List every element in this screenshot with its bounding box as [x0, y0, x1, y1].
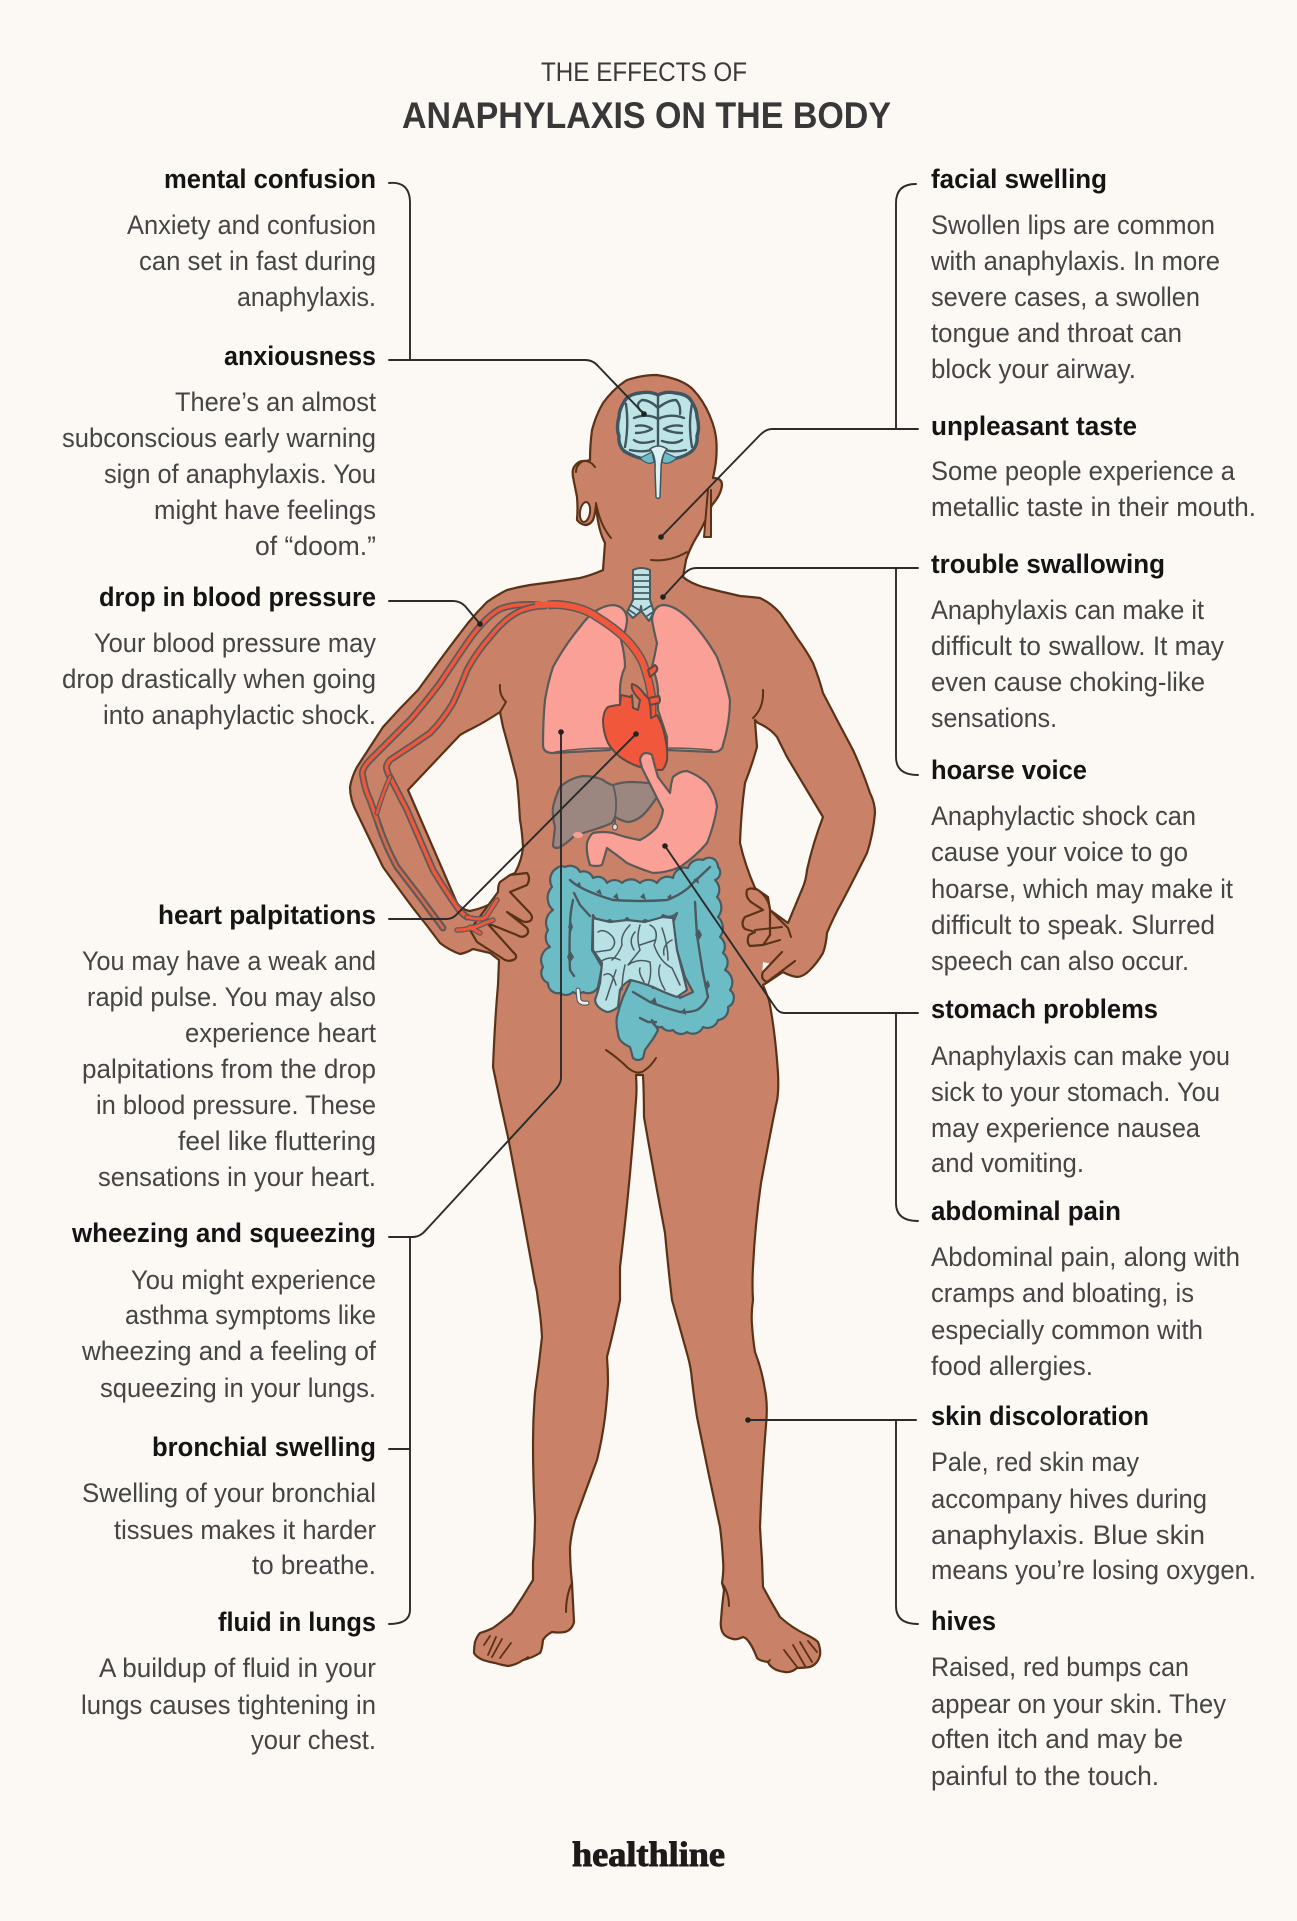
text block: drop in blood pressure [62, 582, 377, 730]
text block: fluid in lungs: lungs causes tightening in [81, 1690, 376, 1720]
text block: heart palpitations: palpitations from the drop [82, 1054, 376, 1084]
text block: unpleasant taste: unpleasant taste [931, 411, 1137, 441]
appendix [578, 990, 587, 1003]
text block: abdominal pain: especially common with [931, 1315, 1203, 1345]
text block: heart palpitations: experience heart [185, 1018, 377, 1048]
text block: trouble swallowing: difficult to swallow. It may [931, 631, 1225, 661]
text block: skin discoloration: Pale, red skin may [931, 1447, 1140, 1477]
text block: stomach problems [931, 994, 1230, 1178]
aortic arch [535, 604, 652, 715]
text block: trouble swallowing: even cause choking-like [931, 667, 1205, 697]
left earring [579, 501, 591, 523]
small intestine [593, 917, 687, 1012]
text block: unpleasant taste [931, 411, 1256, 522]
text block: fluid in lungs [81, 1607, 376, 1755]
text block: hives: appear on your skin. They [931, 1689, 1227, 1719]
text block: heart palpitations: feel like fluttering [178, 1126, 376, 1156]
text block: wheezing and squeezing: squeezing in your lungs. [100, 1373, 376, 1403]
text block: hives: hives [931, 1606, 996, 1636]
text block: anxiousness: There’s an almost [175, 387, 377, 417]
text block: anxiousness: of “doom.” [255, 531, 376, 561]
healthline logo: healthline [572, 1835, 725, 1874]
text block: facial swelling: facial swelling [931, 164, 1107, 194]
text block: stomach problems: Anaphylaxis can make you [931, 1041, 1230, 1071]
text block: anxiousness: subconscious early warning [62, 423, 376, 453]
text block: unpleasant taste: metallic taste in their mouth. [931, 492, 1256, 522]
text block: drop in blood pressure: Your blood pressure may [94, 628, 377, 658]
text block: wheezing and squeezing: wheezing and squeezing [71, 1218, 376, 1248]
text block: stomach problems: and vomiting. [931, 1148, 1084, 1178]
text block: hives: painful to the touch. [931, 1761, 1159, 1791]
text block: facial swelling: block your airway. [931, 354, 1136, 384]
title: THE EFFECTS OF [541, 57, 747, 87]
body silhouette [350, 375, 875, 1672]
text block: anxiousness: might have feelings [154, 495, 376, 525]
text block: bronchial swelling: bronchial swelling [152, 1432, 376, 1462]
text block: wheezing and squeezing: You might experience [131, 1265, 376, 1295]
appendix highlight [578, 990, 587, 1003]
text block: mental confusion: Anxiety and confusion [127, 210, 376, 240]
text block: bronchial swelling: tissues makes it harder [114, 1515, 376, 1545]
title: ANAPHYLAXIS ON THE BODY [402, 95, 891, 136]
text block: bronchial swelling: to breathe. [252, 1550, 376, 1580]
text block: mental confusion [127, 164, 376, 312]
heart [603, 665, 667, 770]
leader: stomach problems and abdominal pain [662, 843, 918, 1221]
text block: facial swelling: Swollen lips are common [931, 210, 1215, 240]
text block: skin discoloration: skin discoloration [931, 1401, 1149, 1431]
text block: hoarse voice: difficult to speak. Slurred [931, 910, 1215, 940]
text block: unpleasant taste: Some people experience a [931, 456, 1235, 486]
text block: facial swelling [930, 164, 1220, 384]
text block: anxiousness: anxiousness [224, 341, 376, 371]
text block: anxiousness [62, 341, 377, 561]
text block: trouble swallowing: trouble swallowing [931, 549, 1165, 579]
text block: stomach problems: stomach problems [931, 994, 1158, 1024]
text block: fluid in lungs: your chest. [251, 1725, 376, 1755]
text block: skin discoloration: means you’re losing oxygen. [931, 1555, 1256, 1585]
text block: fluid in lungs: A buildup of fluid in your [99, 1653, 376, 1683]
text block: wheezing and squeezing: wheezing and a feeling of [81, 1336, 377, 1366]
leader: trouble swallowing and hoarse voice [660, 568, 918, 775]
text block: abdominal pain: food allergies. [931, 1351, 1093, 1381]
text block: hoarse voice: cause your voice to go [931, 837, 1188, 867]
text block: hives: Raised, red bumps can [931, 1652, 1189, 1682]
text block: trouble swallowing [931, 549, 1225, 733]
text block: hoarse voice: Anaphylactic shock can [931, 801, 1196, 831]
leader: skin discoloration and hives [745, 1417, 918, 1624]
text block: heart palpitations: sensations in your heart. [98, 1162, 376, 1192]
text block: facial swelling: with anaphylaxis. In more [930, 246, 1220, 276]
text block: bronchial swelling: Swelling of your bronchial [82, 1478, 376, 1508]
text block: skin discoloration: anaphylaxis. Blue skin [931, 1520, 1205, 1550]
text block: mental confusion: can set in fast during [139, 246, 376, 276]
text block: abdominal pain [931, 1196, 1240, 1381]
text block: heart palpitations [82, 900, 377, 1192]
text block: bronchial swelling [82, 1432, 376, 1580]
right earring [704, 490, 711, 537]
body creases [500, 461, 763, 1612]
text block: heart palpitations: in blood pressure. These [96, 1090, 376, 1120]
text block: heart palpitations: rapid pulse. You may also [87, 982, 376, 1012]
title [402, 57, 891, 136]
text block: hoarse voice: hoarse, which may make it [931, 874, 1234, 904]
text block: fluid in lungs: fluid in lungs [218, 1607, 376, 1637]
text block: wheezing and squeezing: asthma symptoms like [125, 1300, 376, 1330]
stomach [587, 753, 717, 873]
text block: trouble swallowing: Anaphylaxis can make it [931, 595, 1205, 625]
text block: facial swelling: severe cases, a swollen [931, 282, 1200, 312]
right hand [742, 888, 795, 982]
leader: mental confusion and anxiousness [389, 183, 647, 417]
text block: abdominal pain: abdominal pain [931, 1196, 1121, 1226]
text block: anxiousness: sign of anaphylaxis. You [104, 459, 376, 489]
text block: hives [931, 1606, 1227, 1791]
brain [618, 392, 698, 498]
text block: heart palpitations: heart palpitations [158, 900, 376, 930]
text block: hoarse voice: hoarse voice [931, 755, 1087, 785]
text block: drop in blood pressure: drop in blood pressure [99, 582, 376, 612]
text block: wheezing and squeezing [71, 1218, 377, 1403]
text block: facial swelling: tongue and throat can [931, 318, 1182, 348]
text block: trouble swallowing: sensations. [931, 703, 1057, 733]
liver [553, 776, 658, 848]
text block: hives: often itch and may be [931, 1724, 1183, 1754]
trachea [627, 568, 654, 621]
body figure [350, 375, 875, 1672]
text block: mental confusion: anaphylaxis. [237, 282, 376, 312]
leader: drop in blood pressure [389, 601, 483, 627]
left arm arteries [362, 604, 545, 928]
text block: skin discoloration [931, 1401, 1256, 1585]
text block: abdominal pain: Abdominal pain, along with [931, 1242, 1240, 1272]
gap between left arm and torso [408, 712, 523, 911]
text block: heart palpitations: You may have a weak and [82, 946, 376, 976]
gap between right arm and torso [740, 720, 823, 923]
toes [484, 1636, 817, 1667]
text block: stomach problems: sick to your stomach. You [931, 1077, 1220, 1107]
text block: skin discoloration: accompany hives during [931, 1484, 1207, 1514]
leader: wheezing, bronchial swelling, fluid in lungs [389, 729, 564, 1624]
text block: drop in blood pressure: drop drastically when going [62, 664, 376, 694]
left hand [457, 873, 532, 961]
large intestine [541, 858, 734, 1060]
text block: mental confusion: mental confusion [164, 164, 376, 194]
text block: stomach problems: may experience nausea [931, 1113, 1200, 1143]
gap by right fingers [762, 962, 771, 976]
text block: drop in blood pressure: into anaphylactic shock. [103, 700, 376, 730]
text block: hoarse voice [931, 755, 1234, 976]
text block: abdominal pain: cramps and bloating, is [931, 1278, 1194, 1308]
lungs [543, 605, 730, 753]
leader: facial swelling and unpleasant taste [658, 184, 918, 540]
leader: heart palpitations [389, 731, 639, 919]
text block: hoarse voice: speech can also occur. [931, 946, 1189, 976]
